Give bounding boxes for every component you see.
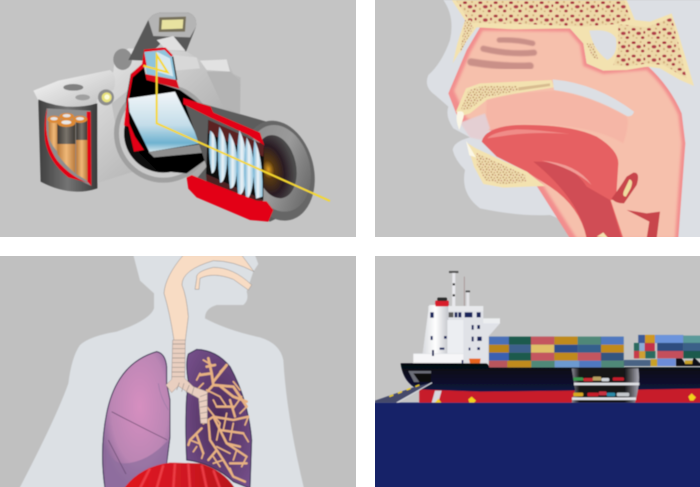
stern ramp <box>375 371 432 403</box>
lungs illustration <box>19 255 304 487</box>
hull <box>401 363 700 403</box>
lifeboat <box>469 359 481 363</box>
panel: head cross-section <box>375 0 700 238</box>
funnel cap <box>435 298 449 306</box>
right lung <box>186 349 252 487</box>
upper oral cavity <box>485 91 628 143</box>
face silhouette <box>427 0 700 238</box>
hard palate bone <box>456 80 554 116</box>
sphenoid sinus <box>589 30 616 60</box>
bronchial tree <box>188 358 248 482</box>
superstructure <box>413 298 500 363</box>
lens barrel <box>183 98 325 228</box>
panel: container ship <box>357 256 700 487</box>
pentaprism <box>144 49 179 89</box>
diaphragm <box>124 463 235 487</box>
reflex mirror <box>128 92 205 157</box>
hull markings <box>432 391 696 403</box>
tracheal bone <box>597 232 608 238</box>
mirror box interior <box>126 63 210 173</box>
lens elements <box>209 127 263 199</box>
trachea and bronchi <box>166 340 207 423</box>
nasal and throat cavity <box>448 27 685 238</box>
jaw bone <box>467 143 545 188</box>
containers main stack <box>489 337 676 367</box>
red cut section <box>124 51 147 152</box>
camera hand grip top <box>33 70 115 108</box>
lens mount ring <box>112 84 213 183</box>
cars <box>573 377 629 396</box>
camera illustration <box>33 13 330 228</box>
soft palate gap <box>553 79 634 116</box>
tongue <box>482 125 623 238</box>
skull bone <box>452 0 694 86</box>
shutter button light <box>98 89 114 105</box>
battery compartment <box>38 99 97 192</box>
teeth <box>457 111 476 157</box>
panel: respiratory system <box>0 255 356 487</box>
windows <box>430 312 482 363</box>
epiglottis <box>612 173 638 203</box>
lens barrel red section <box>183 98 273 222</box>
containers forward stack <box>634 335 700 366</box>
upper airway <box>164 255 254 341</box>
car deck cutaway <box>572 368 639 403</box>
left lung <box>103 352 170 487</box>
light path line <box>143 55 330 201</box>
camera flash head <box>128 13 196 61</box>
camera body <box>97 48 241 183</box>
head anatomy illustration <box>427 0 700 238</box>
larynx <box>627 210 660 238</box>
mouth opening <box>460 113 490 140</box>
red lower hull <box>419 389 700 403</box>
mast <box>449 271 470 308</box>
ship illustration <box>357 271 700 487</box>
batteries <box>47 113 87 181</box>
panel: camera cutaway <box>0 0 356 237</box>
nasal conchae <box>471 40 534 66</box>
body silhouette <box>19 255 304 487</box>
sea <box>357 403 700 487</box>
